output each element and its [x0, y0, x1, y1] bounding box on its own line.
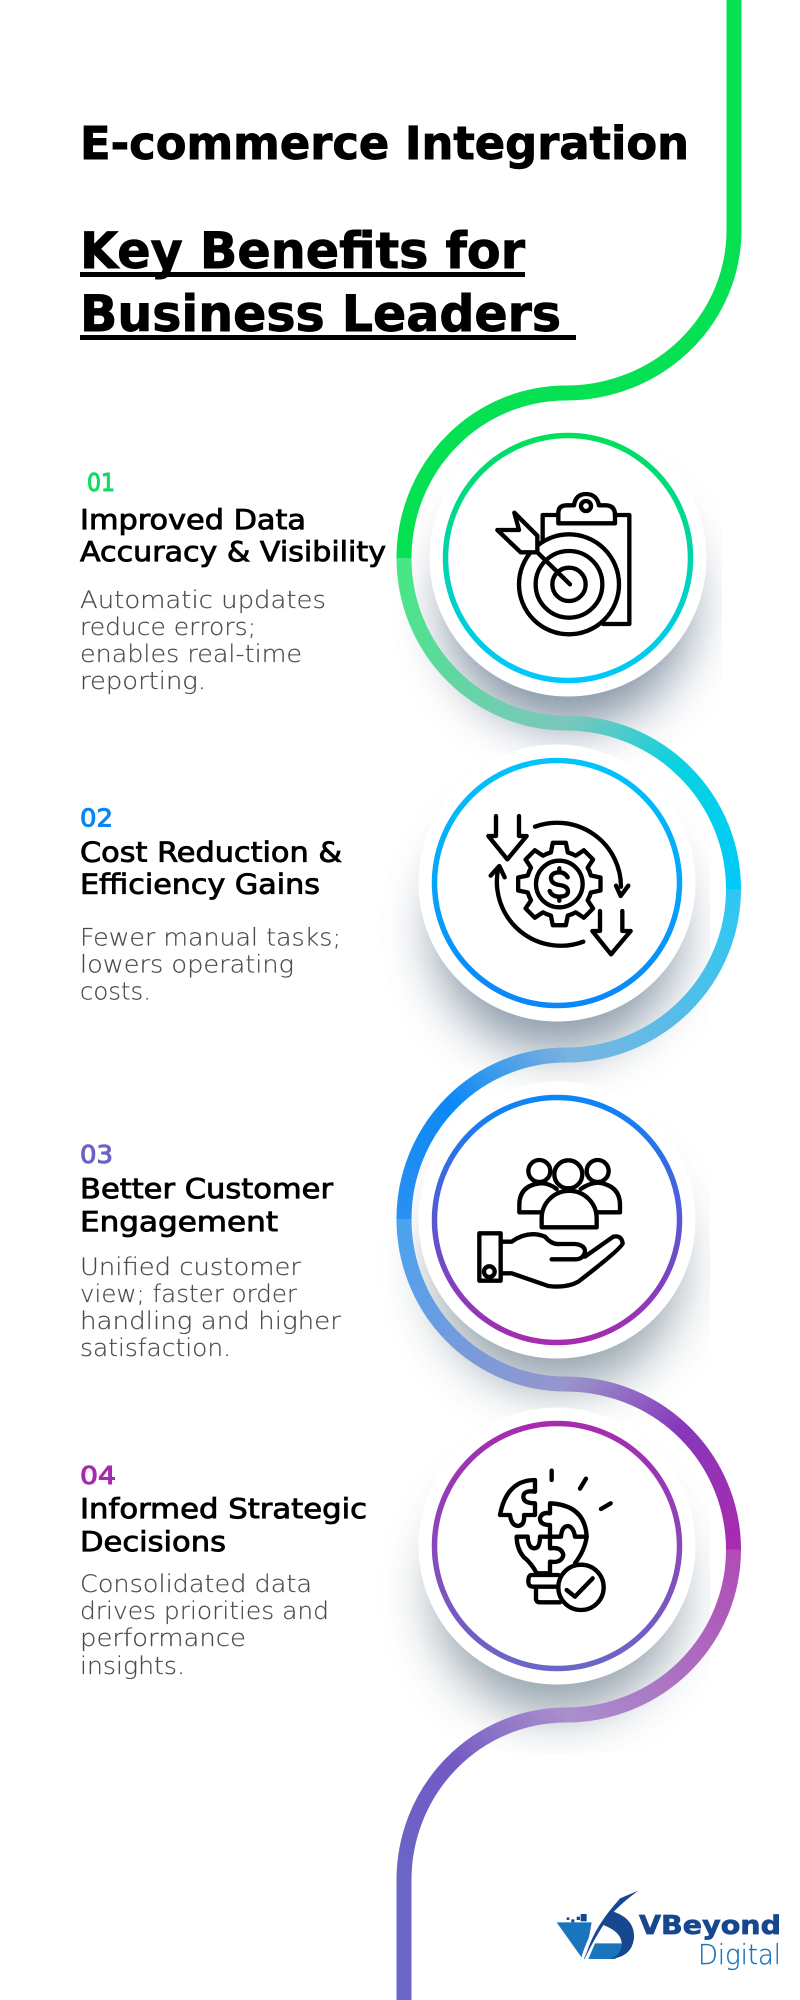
heading 03: Better Customer — [80, 1172, 334, 1205]
description 01: reduce errors; — [80, 613, 256, 641]
icon: puzzle light bulb with check — [500, 1471, 611, 1610]
panel 02: text — [80, 804, 342, 1006]
number 01: 01 — [87, 468, 115, 497]
icon: target with arrow and clipboard — [497, 494, 629, 634]
description 02: Fewer manual tasks; — [80, 924, 341, 952]
logo wordmark VBeyond: VBeyond — [639, 1911, 781, 1941]
heading: E-commerce Integration: E-commerce Integration — [80, 117, 689, 170]
icon: hand holding people — [479, 1160, 623, 1287]
logo: VBeyond Digital — [557, 1891, 781, 1971]
panel 03: text — [80, 1140, 341, 1362]
description 02: lowers operating — [80, 950, 294, 978]
icon: gear with dollar and cost arrows — [488, 816, 631, 954]
logo wordmark Digital: Digital — [698, 1938, 781, 1971]
number 04: 04 — [80, 1461, 116, 1490]
number 02: 02 — [80, 804, 113, 832]
description 02: costs. — [80, 978, 151, 1006]
description 03: Unified customer — [80, 1253, 301, 1281]
heading 02: Efficiency Gains — [80, 868, 320, 900]
heading: Business Leaders: Business Leaders — [80, 285, 561, 343]
circle badge 01 — [430, 420, 706, 696]
description 03: satisfaction. — [80, 1334, 231, 1362]
heading 01: Improved Data — [80, 503, 306, 536]
panel 01: text — [80, 468, 386, 695]
heading 04: Decisions — [80, 1525, 226, 1558]
logo emblem — [557, 1891, 638, 1959]
circle badge 04 — [418, 1408, 696, 1684]
winding gradient path — [404, 0, 734, 2000]
circle badge 03 — [418, 1082, 696, 1358]
description 01: Automatic updates — [80, 586, 326, 614]
title — [80, 117, 689, 343]
panel 04: text — [80, 1461, 367, 1680]
circle badge 02 — [418, 744, 696, 1022]
heading 01: Accuracy & Visibility — [80, 535, 386, 568]
description 01: reporting. — [80, 667, 206, 695]
drop shadows behind circles — [435, 482, 690, 1714]
heading 04: Informed Strategic — [80, 1492, 367, 1525]
heading 03: Engagement — [80, 1205, 278, 1238]
description 03: view; faster order — [80, 1280, 297, 1308]
description 03: handling and higher — [80, 1307, 341, 1335]
description 04: Consolidated data — [80, 1570, 312, 1598]
description 01: enables real-time — [80, 640, 302, 668]
heading: Key Benefits for: Key Benefits for — [80, 222, 525, 280]
description 04: drives priorities and — [80, 1597, 329, 1625]
description 04: insights. — [80, 1652, 185, 1680]
number 03: 03 — [80, 1140, 113, 1169]
description 04: performance — [80, 1624, 246, 1652]
heading 02: Cost Reduction & — [80, 836, 342, 868]
